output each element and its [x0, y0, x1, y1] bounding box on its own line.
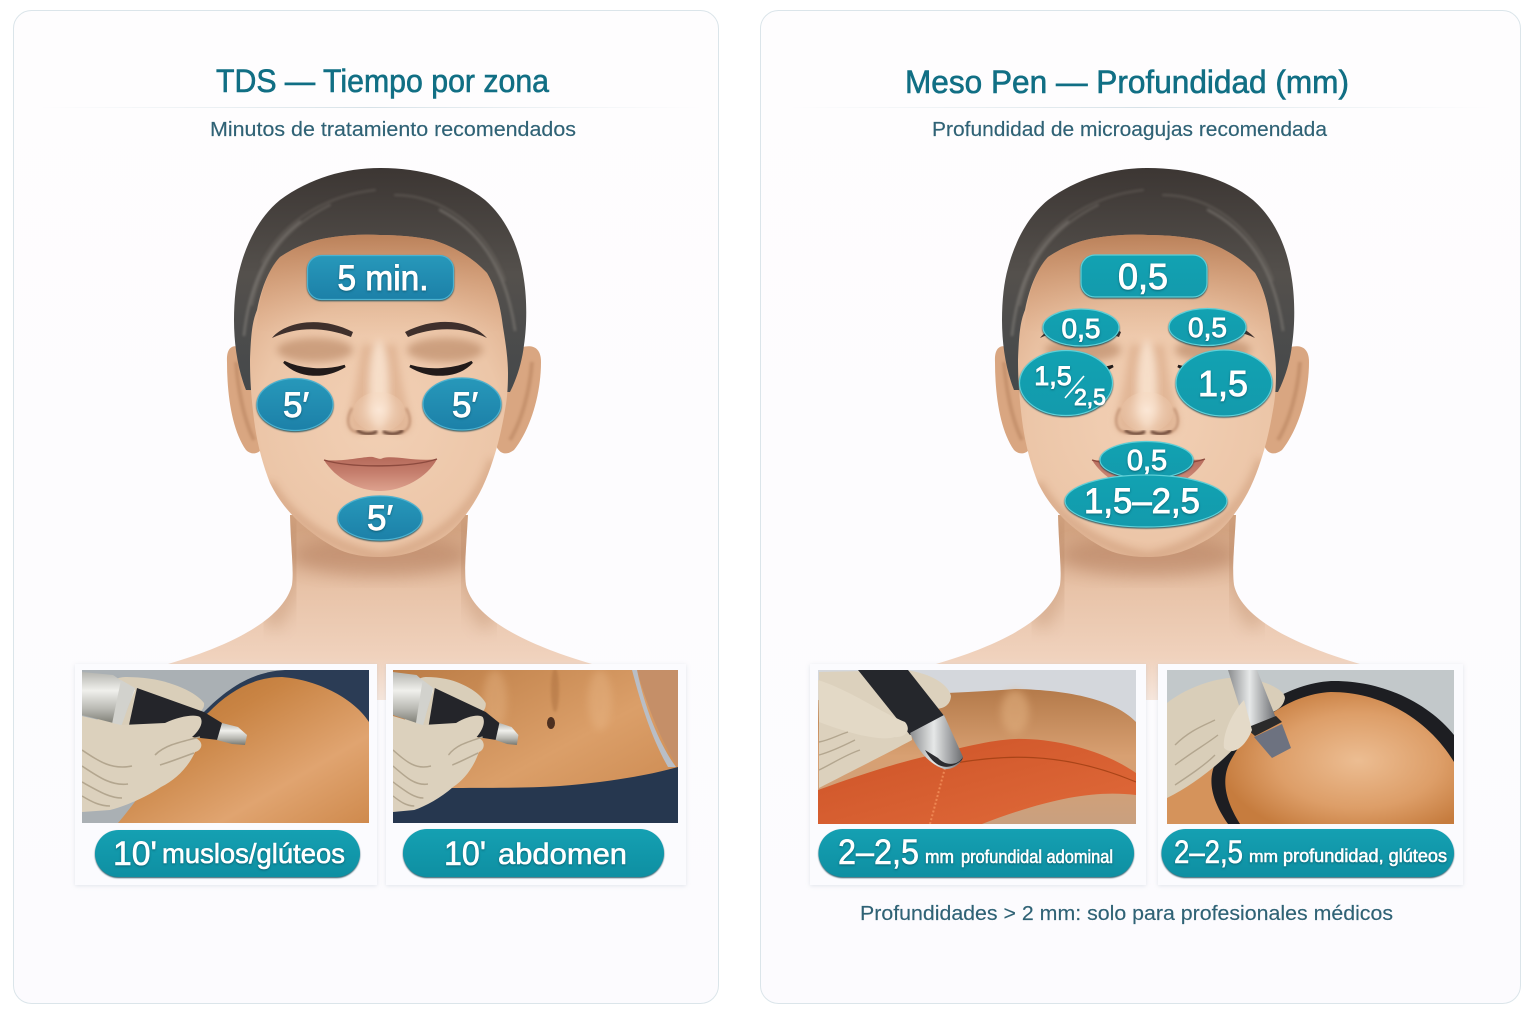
- zone label: forehead 0,5: [1081, 255, 1207, 297]
- photo: device on abdomen with orange garment: [818, 670, 1136, 824]
- photo: device on thigh: [82, 670, 369, 823]
- zone label: forehead 0,5: 0,5: [1118, 256, 1168, 297]
- title: Meso Pen: Meso Pen — Profundidad (mm): [905, 64, 1349, 100]
- label: 2–2,5 mm profundidad, glúteos: profundidad, glúteos: [1283, 846, 1447, 866]
- zone label: left cheek 1,5/2,5: 1,5: [1034, 361, 1072, 391]
- label: 2–2,5 mm profundidal adominal: profundidal adominal: [961, 847, 1113, 867]
- zone label: left cheek 1,5/2,5: 2,5: [1074, 384, 1106, 410]
- zone label: lip 0,5: 0,5: [1127, 445, 1167, 477]
- label: 2–2,5 mm profundidal adominal: 2–2,5: [838, 833, 919, 872]
- zone label: right brow: [1169, 308, 1246, 346]
- zone label: left brow: 0,5: [1062, 313, 1100, 344]
- subtitle: TDS: Minutos de tratamiento recomendados: [210, 119, 576, 141]
- zone label: right cheek 1,5: [1176, 350, 1272, 416]
- subtitle: Meso Pen: Profundidad de microagujas recomendada: [932, 119, 1328, 141]
- zone label: right cheek: [423, 378, 501, 430]
- label: 10' abdomen: [403, 829, 664, 877]
- label: 2–2,5 mm profundidal adominal: mm: [925, 847, 954, 867]
- zone label: forehead 5 min: 5 min.: [338, 259, 428, 298]
- zone label: left cheek: [257, 378, 333, 430]
- label: 2–2,5 mm profundidad, glúteos: [1162, 829, 1454, 877]
- zone label: right cheek: 5′: [452, 386, 478, 425]
- zone label: left brow: [1043, 309, 1119, 346]
- label: 10' abdomen: abdomen: [498, 838, 627, 871]
- card: thighs and glutes: [75, 664, 377, 885]
- card: abdomen: [386, 664, 686, 885]
- panel: TDS: [14, 10, 718, 1004]
- card: abdominal depth: [810, 664, 1146, 885]
- zone label: chin 1,5–2,5: 1,5–2,5: [1084, 482, 1200, 521]
- label: 10' muslos/glúteos: muslos/glúteos: [162, 838, 345, 869]
- card: gluteal depth: [1158, 664, 1463, 885]
- zone label: chin 1,5–2,5: [1065, 475, 1227, 527]
- footnote: Profundidades > 2 mm: solo para profesionales médicos: [860, 903, 1393, 925]
- zone label: chin: 5′: [367, 499, 393, 538]
- label: 10' abdomen: 10': [444, 835, 486, 873]
- label: 2–2,5 mm profundidad, glúteos: 2–2,5: [1174, 834, 1243, 870]
- illustration: face, Meso Pen: [936, 168, 1360, 700]
- zone label: left cheek 1,5/2,5: [1020, 350, 1112, 416]
- label: 10' muslos/glúteos: 10': [113, 835, 157, 873]
- title: TDS: TDS — Tiempo por zona: [216, 63, 549, 99]
- zone label: right brow: 0,5: [1188, 312, 1227, 343]
- zone label: lip 0,5: [1100, 442, 1193, 478]
- photo: device on gluteal area: [1167, 670, 1454, 824]
- label: 2–2,5 mm profundidad, glúteos: mm: [1249, 847, 1278, 866]
- zone label: right cheek 1,5: 1,5: [1198, 363, 1248, 404]
- panel: Meso Pen: [760, 10, 1520, 1004]
- photo: device on abdomen: [393, 668, 678, 823]
- zone label: chin: [338, 496, 422, 540]
- zone label: left cheek: 5′: [283, 386, 309, 425]
- label: 2–2,5 mm profundidal adominal: [818, 829, 1134, 877]
- label: 10' muslos/glúteos: [95, 830, 360, 877]
- zone label: forehead 5 min: [308, 256, 454, 300]
- illustration: face, TDS: [168, 168, 592, 700]
